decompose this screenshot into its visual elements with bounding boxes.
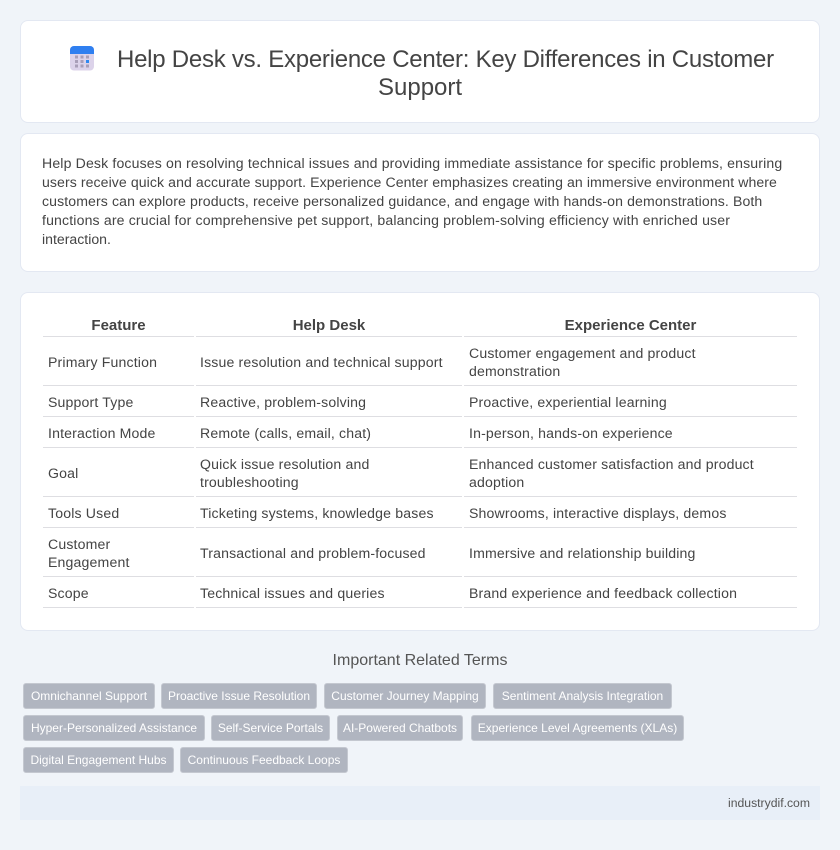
table: comparison: Goal (48, 465, 78, 481)
table: comparison: Reactive, problem-solving (200, 394, 366, 410)
related terms tags: Experience Level Agreements (XLAs) (478, 721, 677, 735)
table: comparison: Interaction Mode (48, 425, 156, 441)
footer bar (20, 786, 820, 820)
table: comparison: Technical issues and queries (200, 585, 385, 601)
footer source: industrydif.com (728, 796, 810, 810)
table: comparison: Feature (91, 317, 146, 334)
intro text (42, 155, 782, 247)
table: comparison: demonstration (469, 363, 560, 379)
table: comparison: In-person, hands-on experience (469, 425, 673, 441)
intro text: customers can explore products, receive personalized guidance, and engage with hands-on demonstrations. Both (42, 193, 762, 209)
table: comparison: Customer (48, 536, 110, 552)
icon: calendar (70, 46, 94, 70)
related terms tags: Continuous Feedback Loops (188, 753, 340, 767)
related terms tags: Customer Journey Mapping (331, 689, 479, 703)
table: comparison: troubleshooting (200, 474, 299, 490)
table: comparison: Immersive and relationship building (469, 545, 696, 561)
related terms tags: Sentiment Analysis Integration (502, 689, 663, 703)
title (117, 46, 774, 101)
table: comparison: Engagement (48, 554, 130, 570)
intro text: users receive quick and accurate support. Experience Center emphasizes creating an immersive environment where (42, 174, 777, 190)
table: comparison (43, 317, 797, 608)
intro text: Help Desk focuses on resolving technical issues and providing immediate assistance for specific problems, ensuring (42, 155, 782, 171)
table: comparison: Issue resolution and technical support (200, 354, 443, 370)
table: comparison: Support Type (48, 394, 134, 410)
table: comparison: Scope (48, 585, 89, 601)
related terms tags: Self-Service Portals (218, 721, 323, 735)
related terms tags: AI-Powered Chatbots (343, 721, 457, 735)
related terms tags: Digital Engagement Hubs (30, 753, 167, 767)
intro text: functions are crucial for comprehensive pet support, balancing problem-solving efficiency with enriched user (42, 212, 730, 228)
table: comparison: Transactional and problem-focused (200, 545, 426, 561)
table: comparison: Enhanced customer satisfaction and product (469, 456, 754, 472)
table: comparison: Brand experience and feedback collection (469, 585, 737, 601)
related terms tags: Hyper-Personalized Assistance (31, 721, 197, 735)
table: comparison: Experience Center (565, 317, 696, 334)
comparison table panel (20, 292, 820, 631)
table: comparison: Help Desk (293, 317, 365, 334)
related terms tags (23, 683, 684, 773)
related terms tags: Proactive Issue Resolution (168, 689, 310, 703)
table: comparison: Quick issue resolution and (200, 456, 369, 472)
table: comparison: Remote (calls, email, chat) (200, 425, 371, 441)
table: comparison: Showrooms, interactive displays, demos (469, 505, 727, 521)
title: Support (378, 74, 462, 101)
related terms tags: Omnichannel Support (31, 689, 147, 703)
table: comparison: Customer engagement and product (469, 345, 696, 361)
intro text: interaction. (42, 231, 111, 247)
intro panel (20, 133, 820, 272)
table: comparison: Ticketing systems, knowledge bases (200, 505, 434, 521)
table: comparison: Primary Function (48, 354, 157, 370)
table: comparison: Tools Used (48, 505, 119, 521)
table: comparison: adoption (469, 474, 524, 490)
header panel (20, 20, 820, 123)
table: comparison: Proactive, experiential learning (469, 394, 667, 410)
title: Help Desk vs. Experience Center: Key Differences in Customer (117, 46, 774, 73)
related terms heading: Important Related Terms (333, 652, 507, 669)
